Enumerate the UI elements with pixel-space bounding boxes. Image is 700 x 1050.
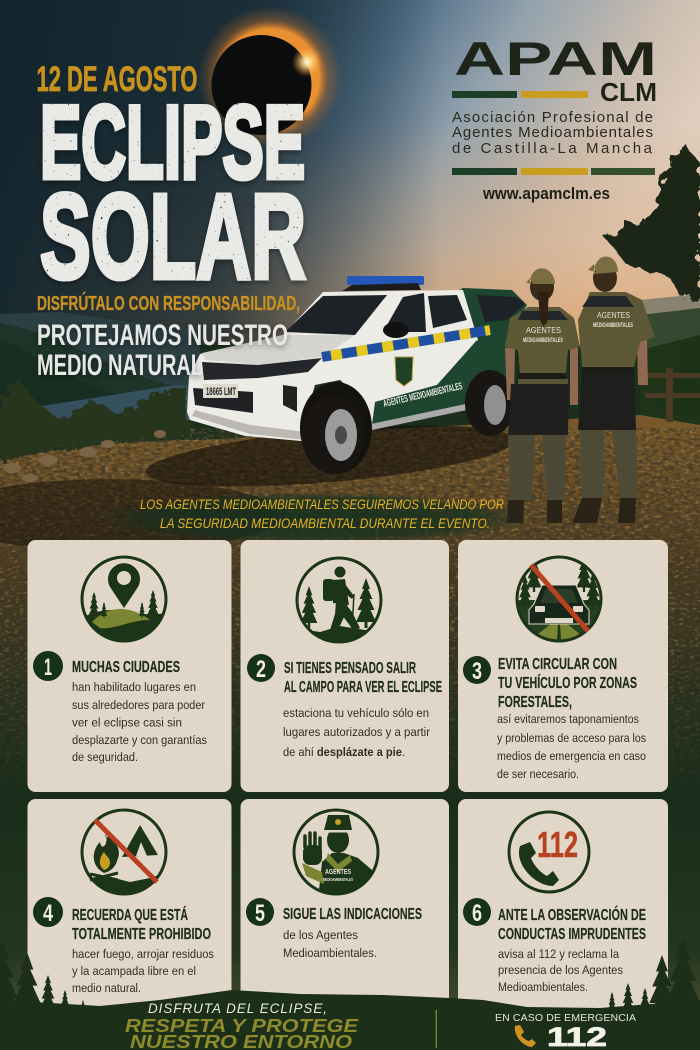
illustration: foreground bushes on the left xyxy=(0,380,190,462)
heading 4 xyxy=(72,905,211,943)
slogan: DISFRÚTALO CON RESPONSABILIDAD, xyxy=(37,291,300,315)
footer emergency callout: EN CASO DE EMERGENCIA xyxy=(495,1012,636,1024)
icon: emergency phone 112: 112 xyxy=(537,824,578,865)
badge 1 xyxy=(33,651,63,681)
text 2: estaciona tu vehículo sólo en xyxy=(283,706,429,720)
icon: emergency phone 112 xyxy=(509,812,589,892)
icon: map pin in landscape xyxy=(80,557,168,645)
truck blue and yellow stripe xyxy=(322,330,490,357)
heading 2 xyxy=(284,660,442,696)
badge 5: 5 xyxy=(255,900,265,927)
text 5 xyxy=(283,928,377,960)
intro message xyxy=(100,492,530,544)
heading 2: AL CAMPO PARA VER EL ECLIPSE xyxy=(284,679,442,696)
truck door shield xyxy=(395,357,413,386)
illustration: eclipsed sun xyxy=(198,6,342,150)
badge 3 xyxy=(463,656,491,685)
text 6 xyxy=(498,947,623,994)
background: sky xyxy=(0,0,700,345)
heading 3: TU VEHÍCULO POR ZONAS xyxy=(498,673,637,692)
logo: APAM CLM xyxy=(452,32,657,203)
text 4: y la acampada libre en el xyxy=(72,964,196,978)
badge 2 xyxy=(247,654,275,683)
footer emergency callout xyxy=(495,1012,636,1050)
logo: APAM CLM: APAM xyxy=(454,32,657,85)
illustration: distant hills and lake xyxy=(0,294,700,435)
text 6: avisa al 112 y reclama la xyxy=(498,947,619,961)
badge 5 xyxy=(246,898,274,927)
heading 3: FORESTALES, xyxy=(498,694,572,711)
footer divider xyxy=(436,1010,437,1048)
text 3: y problemas de acceso para los xyxy=(497,731,646,745)
panel: card 6 xyxy=(458,799,668,1014)
illustration: patrol truck xyxy=(187,276,527,474)
text 1: han habilitado lugares en xyxy=(72,680,196,694)
truck light bar xyxy=(342,276,424,291)
heading 6 xyxy=(498,905,646,943)
panel: card 1 xyxy=(28,540,232,792)
illustration: two agents seen from behind xyxy=(505,256,655,523)
date: 12 DE AGOSTO xyxy=(36,60,198,99)
icon: agent with raised hand: MEDIOAMBIENTALES xyxy=(323,877,353,882)
main title: ECLIPSE xyxy=(40,85,305,201)
main title: SOLAR xyxy=(40,168,306,304)
text 6: Medioambientales. xyxy=(498,980,588,994)
text 2: lugares autorizados y a partir xyxy=(283,725,430,739)
agent right: MEDIOAMBIENTALES xyxy=(593,323,633,329)
agent left: MEDIOAMBIENTALES xyxy=(523,338,563,344)
text 1: sus alrededores para poder xyxy=(72,698,205,712)
illustration: wooden fence xyxy=(645,368,700,422)
truck front wheel xyxy=(300,382,372,474)
illustration: gravel ground xyxy=(0,414,700,800)
text 5: Medioambientales. xyxy=(283,946,377,960)
badge 1: 1 xyxy=(44,654,52,681)
logo: APAM CLM: www.apamclm.es xyxy=(482,184,610,203)
text 4 xyxy=(72,947,214,995)
text 1: desplazarte y con garantías xyxy=(72,733,207,747)
agent right xyxy=(572,256,655,523)
text 3: medios de emergencia en caso xyxy=(497,749,646,763)
truck windows xyxy=(285,293,525,335)
text 5: de los Agentes xyxy=(283,928,358,942)
subtitle xyxy=(37,319,288,382)
badge 4 xyxy=(33,897,63,927)
text 1 xyxy=(72,680,207,764)
text 3: de ser necesario. xyxy=(497,767,579,781)
text 2 xyxy=(283,706,430,759)
logo: APAM CLM: Agentes Medioambientales xyxy=(452,124,653,141)
text 1: de seguridad. xyxy=(72,750,138,764)
footer slogan xyxy=(125,1001,359,1050)
title block xyxy=(36,60,306,382)
agent right: AGENTES xyxy=(597,311,630,320)
heading 2: SI TIENES PENSADO SALIR xyxy=(284,660,416,677)
heading 4: RECUERDA QUE ESTÁ xyxy=(72,905,188,924)
illustration: rocks along the left edge xyxy=(3,430,166,482)
text 6: presencia de los Agentes xyxy=(498,963,623,977)
icon: agent with raised hand xyxy=(294,810,382,900)
logo: APAM CLM: Asociación Profesional de xyxy=(452,109,653,126)
logo: APAM CLM: de Castilla-La Mancha xyxy=(452,140,653,157)
text 4: hacer fuego, arrojar residuos xyxy=(72,947,214,961)
panel: card 5 xyxy=(240,799,449,1014)
badge 3: 3 xyxy=(472,658,482,685)
footer slogan: DISFRUTA DEL ECLIPSE, xyxy=(148,1001,328,1016)
logo: APAM CLM: CLM xyxy=(600,77,657,107)
icon: hiker xyxy=(295,558,385,645)
truck door lettering: AGENTES MEDIOAMBIENTALES xyxy=(382,381,464,410)
truck white body xyxy=(187,290,478,442)
icon: no fire no camping xyxy=(82,810,168,900)
text 4: medio natural. xyxy=(72,981,141,995)
text 3: así evitaremos taponamientos xyxy=(497,712,639,726)
icon: agent with raised hand: AGENTES xyxy=(325,869,351,876)
intro message: LA SEGURIDAD MEDIOAMBIENTAL DURANTE EL EVENTO. xyxy=(160,515,490,531)
truck number plate xyxy=(203,384,238,398)
text 3 xyxy=(497,712,646,781)
intro message: LOS AGENTES MEDIOAMBIENTALES SEGUIREMOS VELANDO POR xyxy=(140,496,504,512)
panel: card 3 xyxy=(458,540,668,792)
truck sill xyxy=(371,402,476,430)
icon: crossed out car in forest xyxy=(517,554,601,642)
main title xyxy=(40,85,306,304)
agent left: AGENTES xyxy=(526,326,561,335)
badge 4: 4 xyxy=(43,900,53,927)
panel: card 4 xyxy=(28,799,232,1014)
footer hill and tree silhouettes xyxy=(0,938,700,1050)
badge 6: 6 xyxy=(472,900,482,927)
heading 5: SIGUE LAS INDICACIONES xyxy=(283,906,422,923)
text 2: de ahí desplázate a pie. xyxy=(283,745,405,759)
icon: gold phone xyxy=(515,1025,536,1047)
heading 3: EVITA CIRCULAR CON xyxy=(498,656,617,673)
footer slogan: RESPETA Y PROTEGE xyxy=(125,1016,359,1036)
truck number plate: 18665 LMT xyxy=(206,386,236,398)
truck rear wheel xyxy=(465,370,515,436)
truck grille and headlight xyxy=(192,358,322,440)
heading 1: MUCHAS CIUDADES xyxy=(72,659,180,676)
heading 3 xyxy=(498,656,637,711)
truck hood shading xyxy=(202,335,355,365)
badge 2: 2 xyxy=(256,656,266,683)
subtitle: PROTEJAMOS NUESTRO xyxy=(37,319,288,352)
text 1: ver el eclipse casi sin xyxy=(72,716,182,730)
agent left xyxy=(505,268,580,523)
truck lower door panel xyxy=(375,340,477,417)
truck green rear xyxy=(372,288,527,426)
heading 4: TOTALMENTE PROHIBIDO xyxy=(72,926,211,943)
illustration: large tree on the right xyxy=(607,142,700,418)
background: lower green area xyxy=(0,800,700,1050)
panel: card 2 xyxy=(240,540,449,792)
badge 6 xyxy=(463,898,491,927)
truck mirror xyxy=(383,322,409,338)
subtitle: MEDIO NATURAL xyxy=(37,349,203,382)
